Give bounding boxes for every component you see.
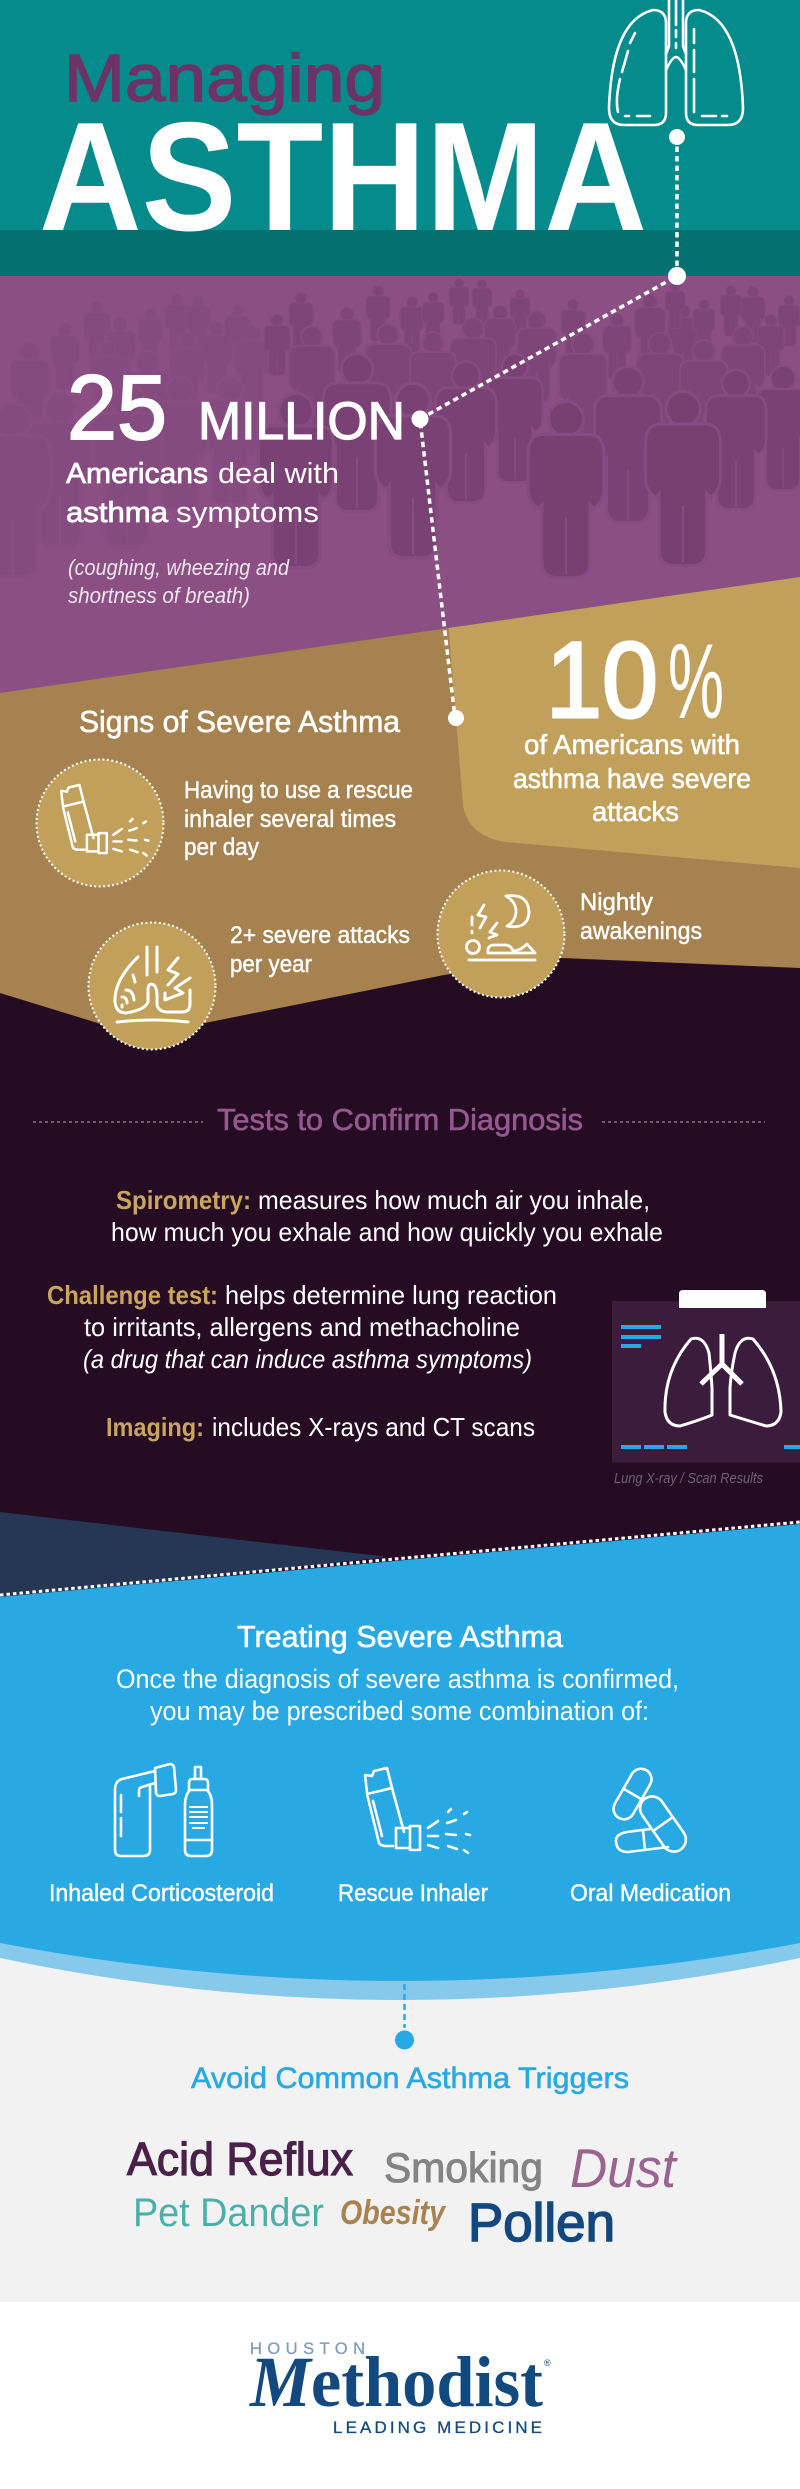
- panel: white footer: [0, 2302, 800, 2489]
- connector: dotted path with nodes: [412, 129, 686, 726]
- text: Americans deal with asthma symptoms: [66, 458, 339, 529]
- text: Americans deal with asthma symptoms: asthma: [66, 497, 169, 529]
- icon: inhaled corticosteroid: [115, 1764, 212, 1856]
- text: spirometry: [111, 1185, 663, 1247]
- text: spirometry: how much you exhale and how quickly you exhale: [111, 1217, 663, 1247]
- word cloud: asthma triggers: Obesity: [340, 2194, 447, 2232]
- text: severe attacks sign: per year: [230, 951, 312, 978]
- word cloud: asthma triggers: Smoking: [384, 2144, 543, 2191]
- caption: x-ray: Lung X-ray / Scan Results: [614, 1470, 763, 1487]
- text: symptom note: [68, 555, 290, 608]
- icon: rescue inhaler badge: [36, 760, 164, 886]
- connector: blue dashed line and dot: [395, 1984, 414, 2050]
- logo: Houston Methodist: HOUSTON: [250, 2340, 365, 2358]
- text: challenge test: Challenge test:: [47, 1280, 218, 1310]
- text: 10 percent description: asthma have severe: [513, 763, 751, 794]
- text: 10 percent description: attacks: [592, 796, 679, 827]
- panel: purple statistics section: [0, 276, 800, 693]
- heading: Avoid Common Asthma Triggers: Avoid Common Asthma Triggers: [191, 2062, 629, 2095]
- illustration: crowd of people: [260, 279, 800, 576]
- logo: Houston Methodist: Methodist: [249, 2342, 543, 2422]
- word cloud: asthma triggers: Dust: [570, 2137, 679, 2199]
- title: Managing: Managing: [64, 41, 385, 116]
- text: symptom note: shortness of breath): [68, 583, 250, 608]
- illustration: lung x-ray clipboard: [612, 1290, 800, 1462]
- title: ASTHMA: ASTHMA: [39, 90, 647, 263]
- text: imaging: Imaging:: [106, 1412, 204, 1442]
- text: rescue inhaler sign: per day: [184, 834, 259, 861]
- label: Rescue Inhaler: Rescue Inhaler: [338, 1880, 488, 1907]
- heading: Signs of Severe Asthma: Signs of Severe Asthma: [79, 704, 401, 739]
- word cloud: asthma triggers: Pollen: [468, 2193, 615, 2253]
- word cloud: asthma triggers: Pet Dander: [133, 2191, 324, 2235]
- icon: nightly awakenings badge: [438, 870, 564, 998]
- panel: dark diagnosis section: [0, 958, 800, 1620]
- text: challenge test: helps determine lung reaction: [225, 1280, 557, 1310]
- text: Americans deal with asthma symptoms: Americans: [66, 458, 208, 490]
- decoration: navy wedge: [0, 1512, 388, 1600]
- decoration: dashed white edge of blue panel: [0, 1522, 800, 1595]
- stat: 10 percent: [546, 619, 724, 741]
- label: Inhaled Corticosteroid: Inhaled Corticosteroid: [49, 1880, 274, 1907]
- stat: 10 percent: 10: [546, 619, 658, 740]
- panel: light gray triggers section: [0, 1900, 800, 2302]
- text: spirometry: measures how much air you inhale,: [258, 1185, 650, 1215]
- text: challenge test: (a drug that can induce asthma symptoms): [83, 1344, 532, 1374]
- stat: 25 million: [67, 357, 405, 459]
- text: 10 percent description: [513, 729, 751, 827]
- text: treatment intro: Once the diagnosis of severe asthma is confirmed,: [116, 1664, 679, 1694]
- decoration: light blue curved band: [0, 1900, 800, 2000]
- word cloud: asthma triggers: Acid Reflux: [127, 2133, 353, 2185]
- heading: Treating Severe Asthma: Treating Severe Asthma: [237, 1619, 564, 1654]
- icon: rescue inhaler: [365, 1768, 470, 1853]
- text: severe attacks sign: 2+ severe attacks: [230, 922, 410, 949]
- text: imaging: includes X-rays and CT scans: [212, 1412, 535, 1442]
- text: nightly awakenings sign: [580, 889, 702, 945]
- heading: Tests to Confirm Diagnosis: Tests to Confirm Diagnosis: [217, 1102, 583, 1137]
- label: Oral Medication: Oral Medication: [570, 1880, 731, 1907]
- text: severe attacks sign: [230, 922, 410, 978]
- stat: 10 percent: %: [668, 621, 724, 741]
- text: nightly awakenings sign: Nightly: [580, 889, 653, 916]
- text: spirometry: Spirometry:: [116, 1185, 251, 1215]
- text: treatment intro: you may be prescribed some combination of:: [150, 1696, 649, 1726]
- text: rescue inhaler sign: Having to use a rescue: [184, 777, 413, 804]
- icon: oral medication pills: [610, 1765, 691, 1856]
- text: Americans deal with asthma symptoms: symptoms: [176, 497, 319, 529]
- stat: 25 million: MILLION: [198, 392, 405, 451]
- word cloud: asthma triggers: [127, 2133, 679, 2253]
- text: symptom note: (coughing, wheezing and: [68, 555, 290, 580]
- panel: blue treatment section: [0, 1524, 800, 1981]
- text: challenge test: [47, 1280, 557, 1374]
- stat: 25 million: 25: [67, 357, 167, 459]
- text: rescue inhaler sign: inhaler several times: [184, 806, 396, 833]
- panel: gold section: [0, 570, 800, 1050]
- text: challenge test: to irritants, allergens and methacholine: [84, 1312, 520, 1342]
- text: treatment intro: [116, 1664, 679, 1726]
- text: 10 percent description: of Americans with: [524, 729, 740, 760]
- panel: teal header: [0, 0, 800, 276]
- icon: lungs outline: [609, 0, 743, 125]
- logo: Houston Methodist: ®: [544, 2358, 551, 2368]
- icon: lungs attack badge: [88, 922, 216, 1050]
- panel: ten percent highlight: [444, 570, 800, 868]
- text: Americans deal with asthma symptoms: deal with: [218, 458, 339, 490]
- text: nightly awakenings sign: awakenings: [580, 918, 702, 945]
- logo: Houston Methodist: LEADING MEDICINE: [333, 2418, 542, 2437]
- text: rescue inhaler sign: [184, 777, 413, 861]
